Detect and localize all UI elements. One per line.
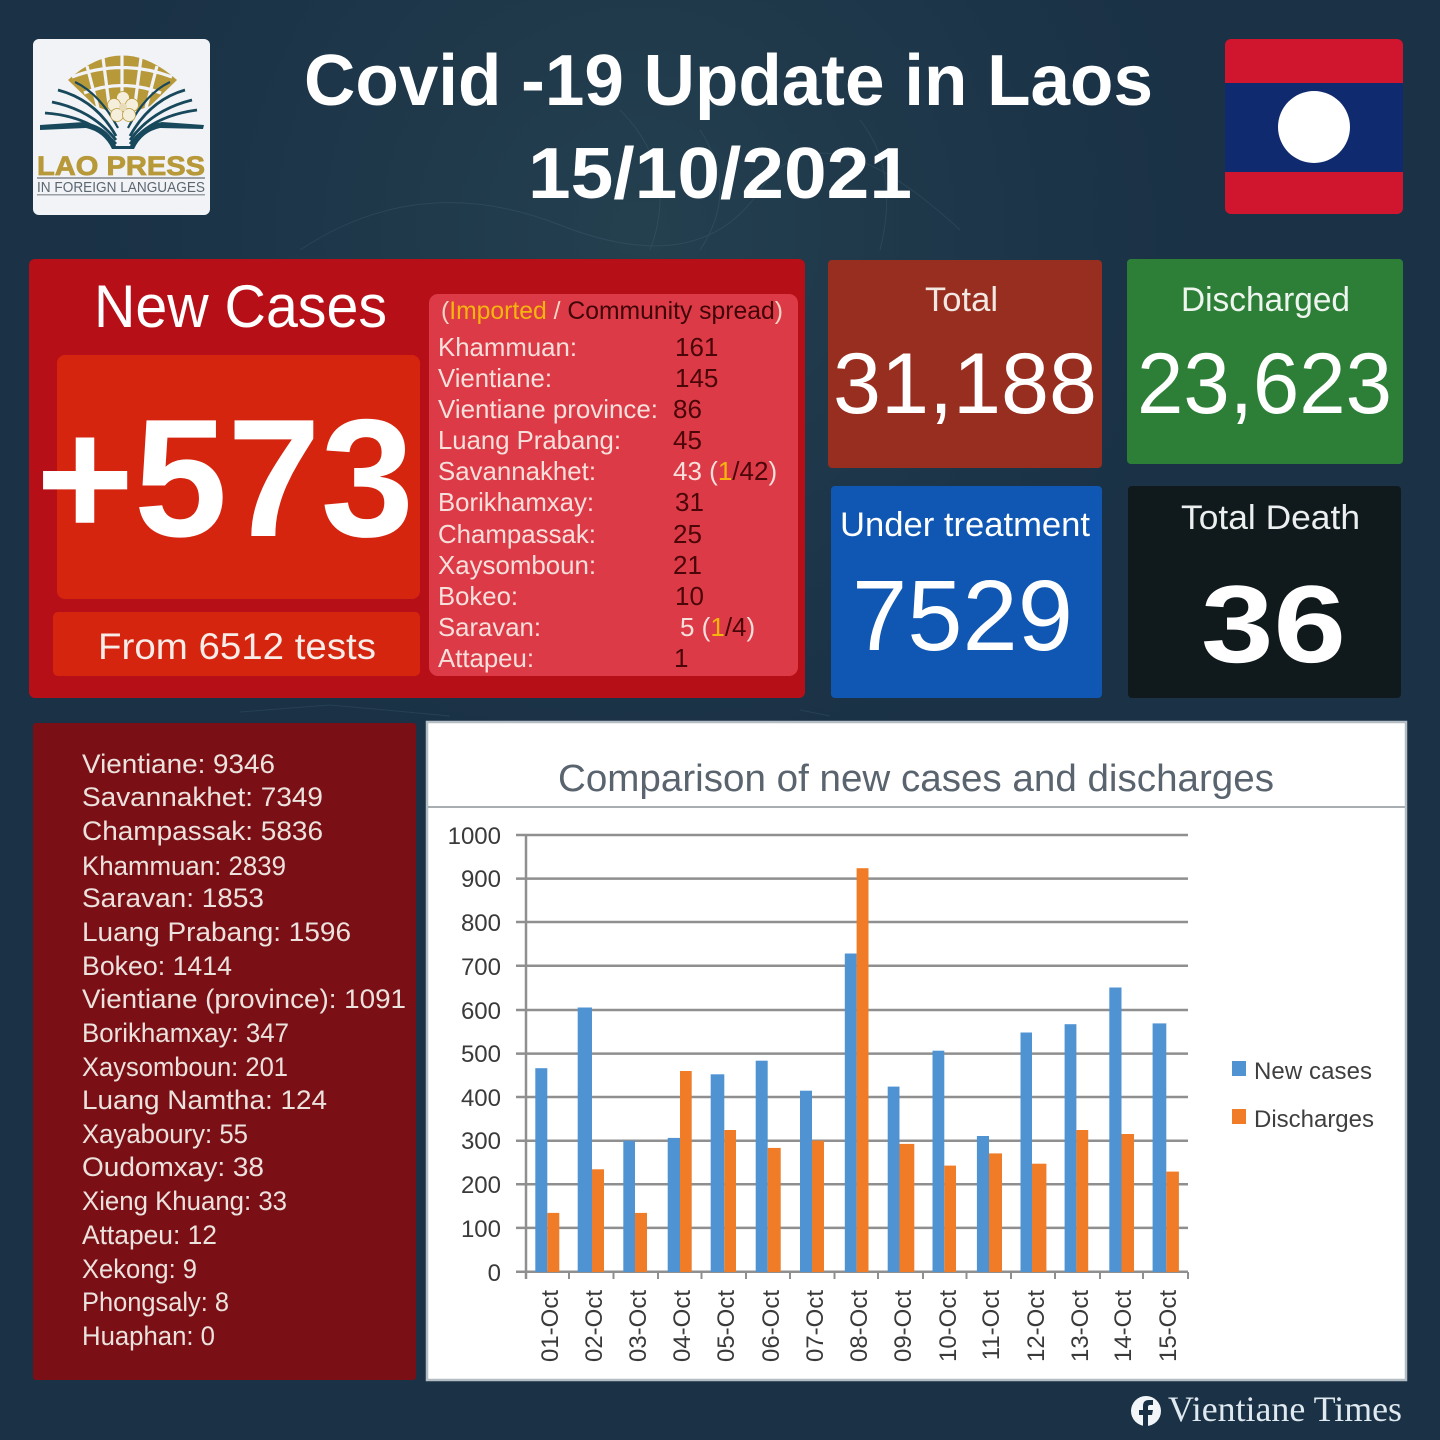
- x axis date labels: 04-Oct: [669, 1290, 696, 1362]
- table rows: Khammuan:: [438, 332, 577, 362]
- x axis date labels: 09-Oct: [890, 1290, 917, 1362]
- table values: [673, 332, 777, 673]
- panel: cumulative cases by province: Huaphan: 0: [82, 1321, 215, 1351]
- table values: 43 (1/42): [673, 456, 777, 486]
- table rows: Champassak:: [438, 519, 596, 549]
- x axis date labels: [537, 1290, 1182, 1362]
- y axis labels: 200: [461, 1172, 501, 1199]
- y axis labels: 600: [461, 998, 501, 1025]
- chart legend: [1232, 1058, 1374, 1133]
- table header: (Imported / Community spread): [441, 297, 783, 325]
- x axis date labels: 01-Oct: [537, 1290, 564, 1362]
- table rows: Vientiane province:: [438, 394, 658, 424]
- panel: cumulative cases by province: Saravan: 1853: [82, 883, 264, 913]
- icon: open book: [40, 82, 204, 149]
- table rows: Borikhamxay:: [438, 487, 594, 517]
- x axis date labels: 15-Oct: [1155, 1290, 1182, 1362]
- table rows: Vientiane:: [438, 363, 552, 393]
- panel: comparison chart: [427, 722, 1406, 1380]
- icon: globe: [68, 55, 177, 116]
- table rows: Savannakhet:: [438, 456, 596, 486]
- footer credit: Vientiane Times: Vientiane Times: [1168, 1389, 1402, 1429]
- x axis date labels: 05-Oct: [713, 1290, 740, 1362]
- panel: discharged: 23,623: [1137, 336, 1392, 432]
- panel: cumulative cases by province: Bokeo: 1414: [82, 951, 232, 981]
- table rows: [438, 332, 658, 673]
- panel: cumulative cases by province: Phongsaly: 8: [82, 1287, 229, 1317]
- x axis date labels: 14-Oct: [1110, 1290, 1137, 1362]
- panel: under treatment: Under treatment: [840, 506, 1091, 544]
- panel: cumulative cases by province: Vientiane (province): 1091: [82, 984, 406, 1014]
- table rows: Bokeo:: [438, 581, 518, 611]
- panel: cumulative cases by province: Vientiane: 9346: [82, 749, 275, 779]
- table values: 86: [673, 394, 702, 424]
- icon: Laos flag: [1225, 39, 1403, 214]
- panel: total death: Total Death: [1181, 499, 1360, 537]
- table values: 145: [675, 363, 718, 393]
- logo: Lao Press: [33, 39, 210, 215]
- y axis labels: 800: [461, 910, 501, 937]
- x axis date labels: 12-Oct: [1023, 1290, 1050, 1362]
- y axis labels: 0: [488, 1260, 501, 1287]
- table values: 10: [675, 581, 704, 611]
- panel: discharged: Discharged: [1181, 281, 1350, 319]
- panel: cumulative cases by province: Savannakhet: 7349: [82, 782, 323, 812]
- panel: under treatment: 7529: [852, 560, 1073, 672]
- table values: 1: [674, 643, 688, 673]
- panel: total: [828, 260, 1102, 468]
- panel: total: 31,188: [833, 336, 1097, 432]
- x axis date labels: 11-Oct: [978, 1290, 1005, 1360]
- panel: provincial breakdown table: [429, 294, 798, 676]
- logo subtitle: IN FOREIGN LANGUAGES: [37, 180, 205, 196]
- x axis date labels: 10-Oct: [935, 1290, 962, 1362]
- panel: discharged: [1127, 259, 1403, 464]
- y axis labels: 300: [461, 1128, 501, 1155]
- panel: cumulative cases by province: Champassak: 5836: [82, 816, 323, 846]
- y axis labels: 1000: [448, 823, 501, 850]
- panel: cumulative cases by province: Khammuan: 2839: [82, 851, 286, 881]
- bars: new cases: [535, 954, 1166, 1272]
- panel: cumulative cases by province: Xayaboury: 55: [82, 1119, 248, 1149]
- big number box: +573: [36, 384, 414, 572]
- logo wordmark: LAO PRESS: [37, 151, 205, 181]
- panel: cumulative cases by province: Attapeu: 12: [82, 1220, 217, 1250]
- bars: discharges: [547, 868, 1179, 1272]
- tests box: [53, 612, 420, 676]
- y axis labels: 700: [461, 954, 501, 981]
- panel: under treatment: [831, 486, 1102, 698]
- panel: cumulative cases by province: Xekong: 9: [82, 1254, 197, 1284]
- x axis date labels: 07-Oct: [802, 1290, 829, 1362]
- x axis date labels: 08-Oct: [846, 1290, 873, 1362]
- panel: cumulative cases by province: [33, 723, 416, 1380]
- chart title: Comparison of new cases and discharges: [558, 758, 1274, 800]
- panel: new cases: [29, 259, 805, 698]
- x axis date labels: 13-Oct: [1067, 1290, 1094, 1362]
- table values: 5 (1/4): [680, 612, 755, 642]
- y axis labels: 500: [461, 1041, 501, 1068]
- icon: facebook: [1131, 1396, 1161, 1426]
- icon: flower: [108, 92, 138, 122]
- x axis date labels: 03-Oct: [625, 1290, 652, 1362]
- heading: New Cases: New Cases: [94, 273, 387, 340]
- title: 15/10/2021: [528, 134, 912, 214]
- y axis labels: 100: [461, 1216, 501, 1243]
- table values: 161: [675, 332, 718, 362]
- y axis labels: 400: [461, 1085, 501, 1112]
- table values: 21: [673, 550, 702, 580]
- y axis labels: [448, 823, 501, 1287]
- table values: 45: [673, 425, 702, 455]
- panel: total death: 36: [1201, 563, 1346, 686]
- table rows: Luang Prabang:: [438, 425, 621, 455]
- table rows: Saravan:: [438, 612, 541, 642]
- panel: total death: [1128, 486, 1401, 698]
- table values: 31: [675, 487, 704, 517]
- chart legend: Discharges: [1254, 1106, 1374, 1133]
- title: [304, 41, 1153, 214]
- panel: cumulative cases by province: Xieng Khuang: 33: [82, 1186, 287, 1216]
- y axis labels: 900: [461, 866, 501, 893]
- panel: cumulative cases by province: Xaysomboun: 201: [82, 1052, 288, 1082]
- panel: cumulative cases by province: Borikhamxay: 347: [82, 1018, 289, 1048]
- table values: 25: [673, 519, 702, 549]
- panel: cumulative cases by province: Luang Namtha: 124: [82, 1085, 327, 1115]
- panel: cumulative cases by province: Luang Prabang: 1596: [82, 917, 351, 947]
- panel: cumulative cases by province: Oudomxay: 38: [82, 1152, 264, 1182]
- chart legend: New cases: [1254, 1058, 1372, 1085]
- tests box: From 6512 tests: [98, 626, 376, 667]
- x axis date labels: 02-Oct: [581, 1290, 608, 1362]
- table rows: Attapeu:: [438, 643, 534, 673]
- panel: total: Total: [925, 281, 998, 319]
- x axis date labels: 06-Oct: [758, 1290, 785, 1362]
- chart gridlines and axes: [516, 835, 1188, 1279]
- title: Covid -19 Update in Laos: [304, 41, 1153, 121]
- table rows: Xaysomboun:: [438, 550, 596, 580]
